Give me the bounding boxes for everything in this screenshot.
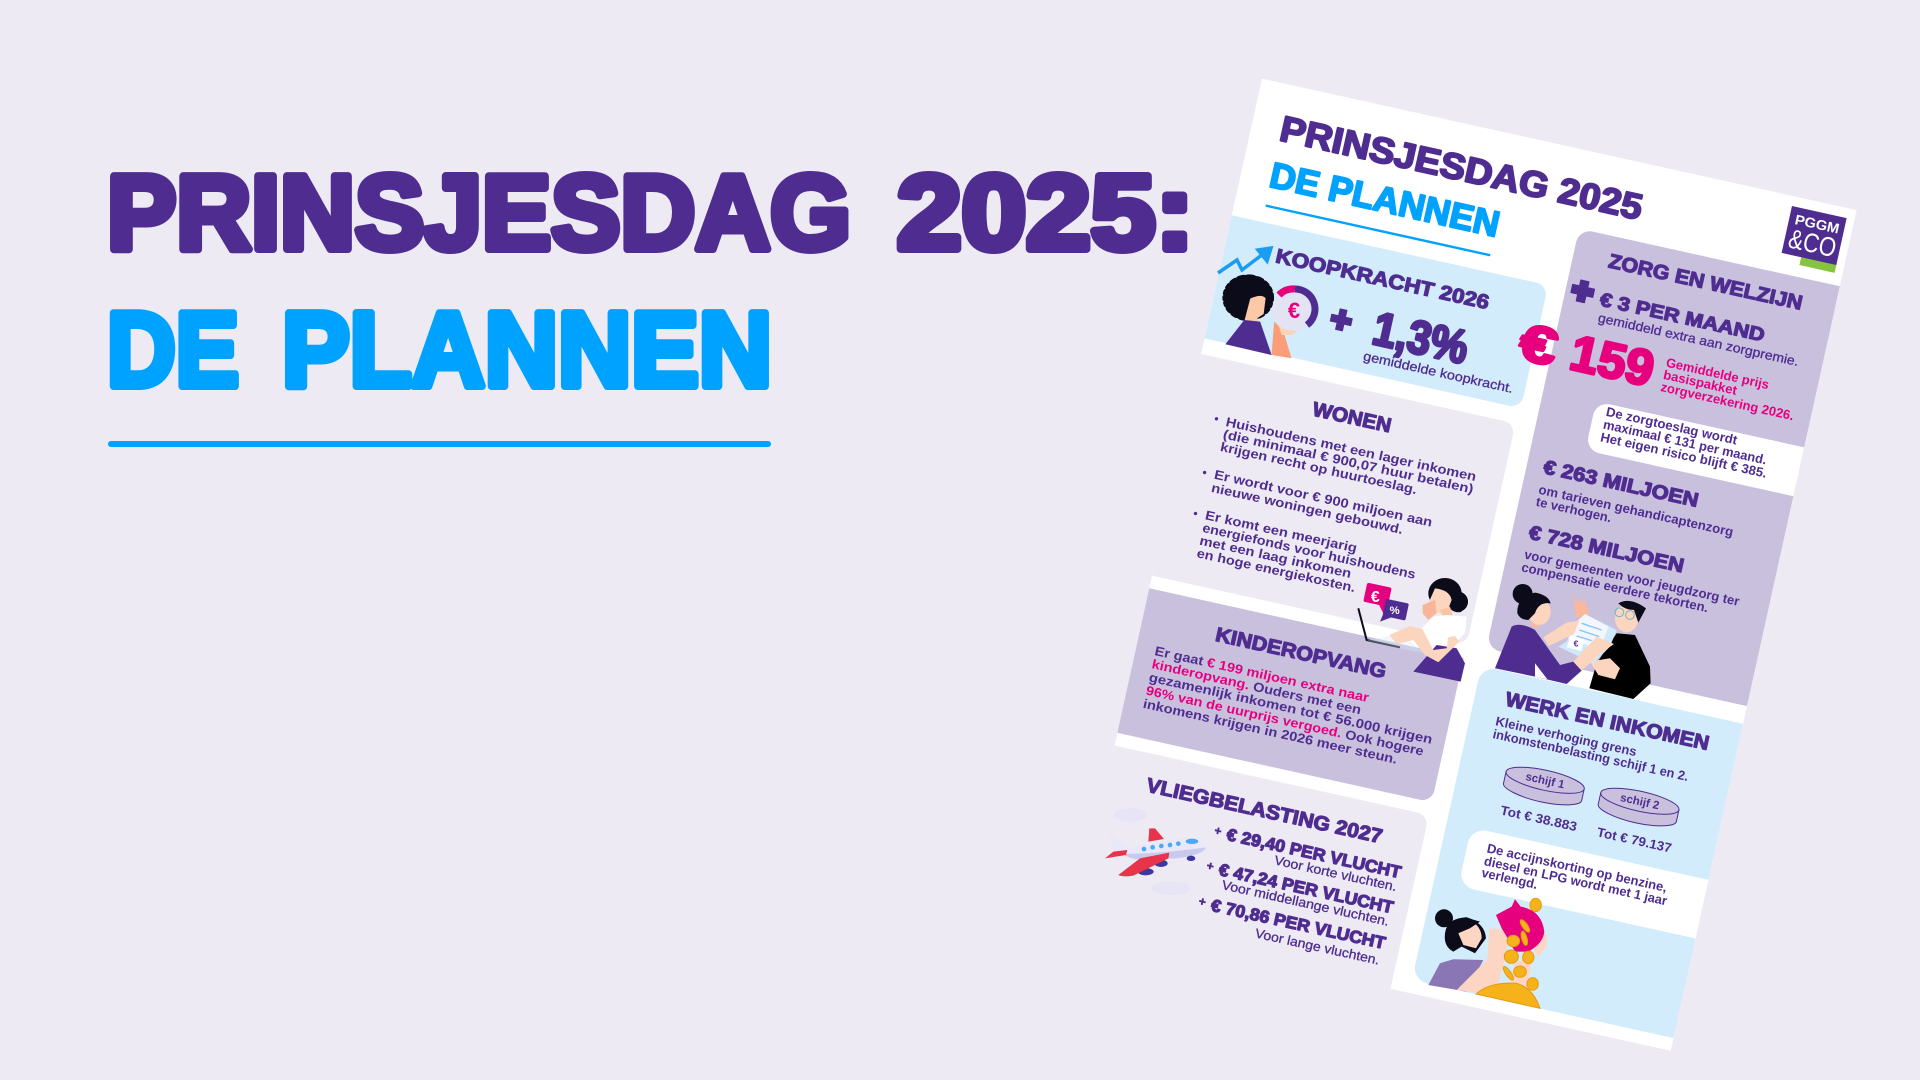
panel: wonen: energiefonds voor huishoudens xyxy=(1201,520,1417,582)
callout: zorgtoeslag: maximaal € 131 per maand. xyxy=(1602,417,1768,467)
main heading: De plannen: PLANNEN xyxy=(282,291,772,409)
sheet title xyxy=(1263,108,1647,286)
disc: schijf 1 xyxy=(1501,762,1586,810)
panel: kinderopvang: Er gaat € 199 miljoen extra naar xyxy=(1153,643,1370,705)
logo: PGGM & CO xyxy=(1780,206,1847,273)
panel: wonen: Er komt een meerjarig xyxy=(1204,507,1359,555)
disc: schijf 2 xyxy=(1596,783,1681,831)
panel: vliegbelasting xyxy=(1076,745,1429,989)
panel: vliegbelasting: + xyxy=(1197,894,1207,909)
panel: zorg en welzijn xyxy=(1454,221,1840,706)
sheet title: PRINSJESDAG 2025 xyxy=(1276,108,1647,228)
illustration: woman at laptop: % xyxy=(1390,605,1400,617)
panel: wonen: met een laag inkomen xyxy=(1198,533,1353,581)
panel: zorg en welzijn: voor gemeenten voor jeugdzorg ter xyxy=(1523,547,1741,609)
panel: vliegbelasting: Voor middellange vluchten. xyxy=(1220,877,1391,929)
panel: vliegbelasting: € 70,86 PER VLUCHT xyxy=(1209,896,1388,953)
panel: vliegbelasting: + xyxy=(1213,823,1223,838)
panel: zorg en welzijn: 159 xyxy=(1565,324,1659,397)
panel: zorg en welzijn: € xyxy=(1514,313,1563,378)
illustration: woman with euro chart xyxy=(1225,277,1315,358)
sheet title: DE PLANNEN xyxy=(1266,154,1503,245)
panel: wonen: WONEN xyxy=(1310,399,1393,437)
callout: accijnskorting xyxy=(1458,827,1709,939)
panel: werk en inkomen: Tot € 38.883 xyxy=(1499,803,1579,834)
panel: zorg en welzijn: ZORG EN WELZIJN xyxy=(1606,251,1804,315)
panel: vliegbelasting: Voor lange vluchten. xyxy=(1254,926,1381,968)
panel: kinderopvang: inkomens krijgen in 2026 meer steun. xyxy=(1142,696,1399,767)
panel: wonen: nieuwe woningen gebouwd. xyxy=(1210,480,1405,537)
panel: wonen: Huishoudens met een lager inkomen xyxy=(1225,414,1478,484)
panel: kinderopvang: 96% van de uurprijs vergoed. Ook hogere xyxy=(1145,683,1425,759)
panel: vliegbelasting: VLIEGBELASTING 2027 xyxy=(1144,775,1384,848)
logo: PGGM & CO: PGGM xyxy=(1794,211,1841,237)
panel: werk en inkomen xyxy=(1412,666,1743,1038)
panel: zorg en welzijn: te verhogen. xyxy=(1535,494,1613,525)
panel: vliegbelasting: + xyxy=(1205,858,1215,874)
main heading: Prinsjesdag 2025 xyxy=(107,154,1194,272)
disc: schijf 2: schijf 2 xyxy=(1619,792,1660,812)
panel: kinderopvang: KINDEROPVANG xyxy=(1213,624,1388,683)
illustration: woman with euro chart: € xyxy=(1288,298,1300,323)
callout: accijnskorting: verlengd. xyxy=(1480,865,1539,892)
icon: rising zigzag arrow xyxy=(1218,248,1271,273)
panel: vliegbelasting: € 29,40 PER VLUCHT xyxy=(1225,825,1403,882)
illustration: woman at laptop xyxy=(1358,578,1469,682)
panel: wonen xyxy=(1152,354,1516,645)
heading underline xyxy=(108,441,771,447)
illustration: woman with piggy bank xyxy=(1428,898,1547,1008)
panel: kinderopvang: gezamenlijk inkomen tot € 56.000 krijgen xyxy=(1148,670,1434,747)
panel: zorg en welzijn: basispakket xyxy=(1662,367,1739,398)
panel: zorg en welzijn: compensatie eerdere tekorten. xyxy=(1520,559,1710,615)
main heading: Prinsjesdag 2025: PRINSJESDAG xyxy=(107,154,851,272)
panel: werk en inkomen: inkomstenbelasting schijf 1 en 2. xyxy=(1491,726,1690,784)
panel: zorg en welzijn: zorgverzekering 2026. xyxy=(1659,379,1795,423)
panel: kinderopvang: kinderopvang. Ouders met een xyxy=(1150,656,1363,717)
panel: zorg en welzijn: € 3 PER MAAND xyxy=(1598,290,1767,346)
panel: koopkracht: 1,3% xyxy=(1368,301,1473,374)
panel: zorg en welzijn: € 263 MILJOEN xyxy=(1541,456,1700,512)
main heading: Prinsjesdag 2025: 2025: xyxy=(897,154,1194,272)
panel: vliegbelasting: € 47,24 PER VLUCHT xyxy=(1217,860,1396,917)
panel: wonen: Er wordt voor € 900 miljoen aan xyxy=(1213,467,1434,530)
panel: koopkracht: gemiddelde koopkracht. xyxy=(1362,348,1515,396)
panel: werk en inkomen: WERK EN INKOMEN xyxy=(1503,689,1711,755)
illustration: two people with document: € xyxy=(1574,639,1579,649)
panel: werk en inkomen: Kleine verhoging grens xyxy=(1494,713,1638,759)
panel: wonen: krijgen recht op huurtoeslag. xyxy=(1219,439,1418,497)
logo: PGGM & CO: &CO xyxy=(1786,224,1839,263)
sheet background xyxy=(1076,79,1857,1051)
panel: wonen: (die minimaal € 900,07 huur betalen) xyxy=(1222,427,1475,496)
panel: koopkracht xyxy=(1205,215,1548,408)
panel: zorg en welzijn: om tarieven gehandicaptenzorg xyxy=(1537,482,1735,539)
infographic sheet xyxy=(1076,79,1857,1051)
panel: kinderopvang xyxy=(1117,588,1464,802)
panel: vliegbelasting: Voor korte vluchten. xyxy=(1273,852,1398,894)
callout: zorgtoeslag: De zorgtoeslag wordt xyxy=(1605,404,1739,448)
illustration: airplane xyxy=(1105,808,1206,895)
panel: wonen: en hoge energiekosten. xyxy=(1195,545,1357,595)
disc: schijf 1: schijf 1 xyxy=(1524,771,1566,792)
callout: accijnskorting: diesel en LPG wordt met 1 jaar xyxy=(1483,853,1669,908)
panel: koopkracht: KOOPKRACHT 2026 xyxy=(1274,246,1491,314)
panel: zorg en welzijn: € 728 MILJOEN xyxy=(1527,522,1686,577)
panel: zorg en welzijn: gemiddeld extra aan zorgpremie. xyxy=(1597,310,1800,369)
illustration: two people with document xyxy=(1495,584,1651,699)
main heading: De plannen: DE xyxy=(107,291,239,409)
panel: zorg en welzijn: Gemiddelde prijs xyxy=(1665,355,1770,392)
callout: zorgtoeslag xyxy=(1585,401,1804,496)
panel: werk en inkomen: Tot € 79.137 xyxy=(1596,824,1673,855)
callout: accijnskorting: De accijnskorting op benzine, xyxy=(1486,841,1668,895)
callout: zorgtoeslag: Het eigen risico blijft € 385. xyxy=(1599,429,1768,481)
illustration: woman at laptop: € xyxy=(1371,589,1380,606)
